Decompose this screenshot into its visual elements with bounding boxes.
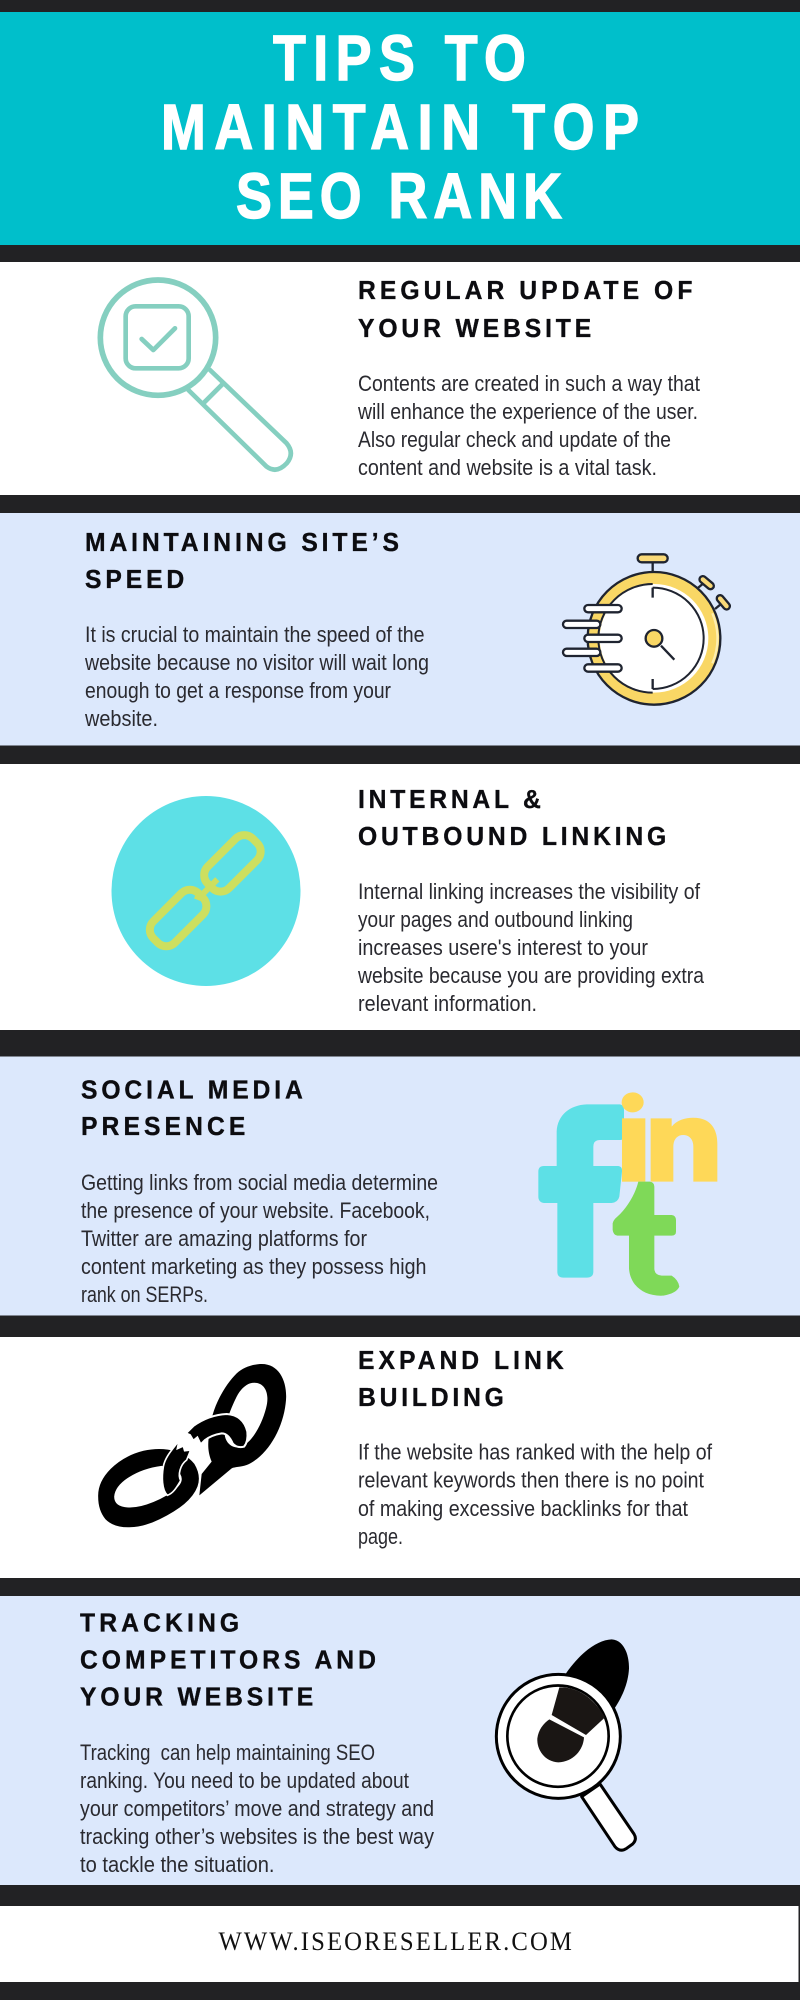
text: regular update body bbox=[357, 371, 700, 480]
text: regular update body: Also regular check and update of the bbox=[358, 427, 671, 452]
text: social media presence body: Getting links from social media determine bbox=[81, 1170, 438, 1195]
icon: stopwatch bbox=[563, 554, 731, 705]
title: TIPS TO bbox=[273, 22, 526, 94]
text: expand link building body: page. bbox=[358, 1524, 403, 1549]
text: tracking competitors body: to tackle the situation. bbox=[80, 1852, 274, 1877]
text: expand link building body: If the website has ranked with the help of bbox=[358, 1440, 713, 1464]
text: tracking competitors body: tracking other’s websites is the best way bbox=[80, 1824, 434, 1849]
heading: tracking competitors: YOUR WEBSITE bbox=[80, 1683, 313, 1712]
heading: internal and outbound linking bbox=[358, 785, 666, 851]
text: internal and outbound linking body: website because you are providing extra bbox=[357, 963, 705, 988]
text: social media presence body: the presence of your website. Facebook, bbox=[81, 1198, 430, 1223]
heading: tracking competitors: COMPETITORS AND bbox=[80, 1646, 376, 1675]
text: social media presence body: rank on SERPs. bbox=[81, 1282, 208, 1307]
text: tracking competitors body: Tracking can help maintaining SEO bbox=[80, 1740, 375, 1765]
heading: social media presence: PRESENCE bbox=[81, 1112, 245, 1141]
heading: site speed: MAINTAINING SITE’S bbox=[85, 528, 399, 557]
heading: social media presence bbox=[81, 1076, 303, 1141]
panel: tracking competitors bbox=[0, 1596, 800, 1885]
text: site speed body: It is crucial to maintain the speed of the bbox=[85, 622, 424, 647]
heading: tracking competitors: TRACKING bbox=[80, 1609, 239, 1638]
icon: magnifier over footprint bbox=[496, 1639, 635, 1850]
icon: social media letter shapes bbox=[538, 1092, 717, 1296]
icon: broken black chain bbox=[97, 1364, 286, 1528]
heading: expand link building: EXPAND LINK bbox=[358, 1346, 564, 1375]
heading: expand link building: BUILDING bbox=[358, 1383, 504, 1412]
text: regular update body: Contents are created in such a way that bbox=[358, 371, 700, 396]
heading: internal and outbound linking: OUTBOUND LINKING bbox=[358, 822, 666, 851]
title bbox=[161, 22, 639, 232]
heading: tracking competitors bbox=[80, 1609, 376, 1712]
text: tracking competitors body: your competitors’ move and strategy and bbox=[80, 1796, 434, 1821]
text: internal and outbound linking body: your pages and outbound linking bbox=[358, 907, 633, 932]
text: internal and outbound linking body bbox=[357, 879, 705, 1016]
text: expand link building body bbox=[358, 1440, 713, 1549]
text: internal and outbound linking body: relevant information. bbox=[358, 991, 537, 1016]
text: website address: WWW.ISEORESELLER.COM bbox=[218, 1927, 572, 1956]
heading: internal and outbound linking: INTERNAL & bbox=[358, 785, 541, 814]
text: expand link building body: relevant keywords then there is no point bbox=[358, 1468, 704, 1492]
text: tracking competitors body bbox=[80, 1740, 434, 1877]
text: tracking competitors body: ranking. You need to be updated about bbox=[80, 1768, 409, 1793]
text: internal and outbound linking body: increases usere's interest to your bbox=[358, 935, 648, 960]
text: site speed body: enough to get a response from your bbox=[85, 678, 391, 703]
panel: social media presence bbox=[0, 1056, 800, 1316]
heading: regular update: REGULAR UPDATE OF bbox=[358, 276, 692, 305]
text: social media presence body: content marketing as they possess high bbox=[81, 1254, 426, 1279]
heading: regular update: YOUR WEBSITE bbox=[358, 314, 591, 343]
panel: regular update bbox=[0, 262, 800, 495]
panel: title banner bbox=[0, 12, 800, 245]
title: SEO RANK bbox=[236, 160, 562, 232]
panel: internal and outbound linking bbox=[0, 764, 800, 1030]
text: internal and outbound linking body: Internal linking increases the visibility of bbox=[358, 879, 701, 904]
text: regular update body: will enhance the experience of the user. bbox=[357, 399, 698, 424]
text: site speed body: website. bbox=[84, 706, 158, 731]
text: site speed body: website because no visitor will wait long bbox=[84, 650, 429, 675]
heading: social media presence: SOCIAL MEDIA bbox=[81, 1076, 303, 1105]
panel: website footer bbox=[0, 1906, 798, 1982]
icon: chain in turquoise circle bbox=[112, 796, 300, 986]
text: site speed body bbox=[84, 622, 429, 731]
heading: regular update bbox=[358, 276, 692, 343]
heading: expand link building bbox=[358, 1346, 564, 1412]
icon: magnifier with check mark bbox=[100, 280, 291, 470]
heading: site speed: SPEED bbox=[85, 565, 184, 594]
text: regular update body: content and website is a vital task. bbox=[358, 455, 657, 480]
title: MAINTAIN TOP bbox=[161, 91, 639, 163]
panel: site speed bbox=[0, 513, 800, 746]
panel: expand link building bbox=[0, 1337, 800, 1578]
text: social media presence body: Twitter are amazing platforms for bbox=[81, 1226, 367, 1251]
text: social media presence body bbox=[81, 1170, 438, 1307]
text: expand link building body: of making excessive backlinks for that bbox=[358, 1496, 688, 1521]
heading: site speed bbox=[85, 528, 399, 594]
